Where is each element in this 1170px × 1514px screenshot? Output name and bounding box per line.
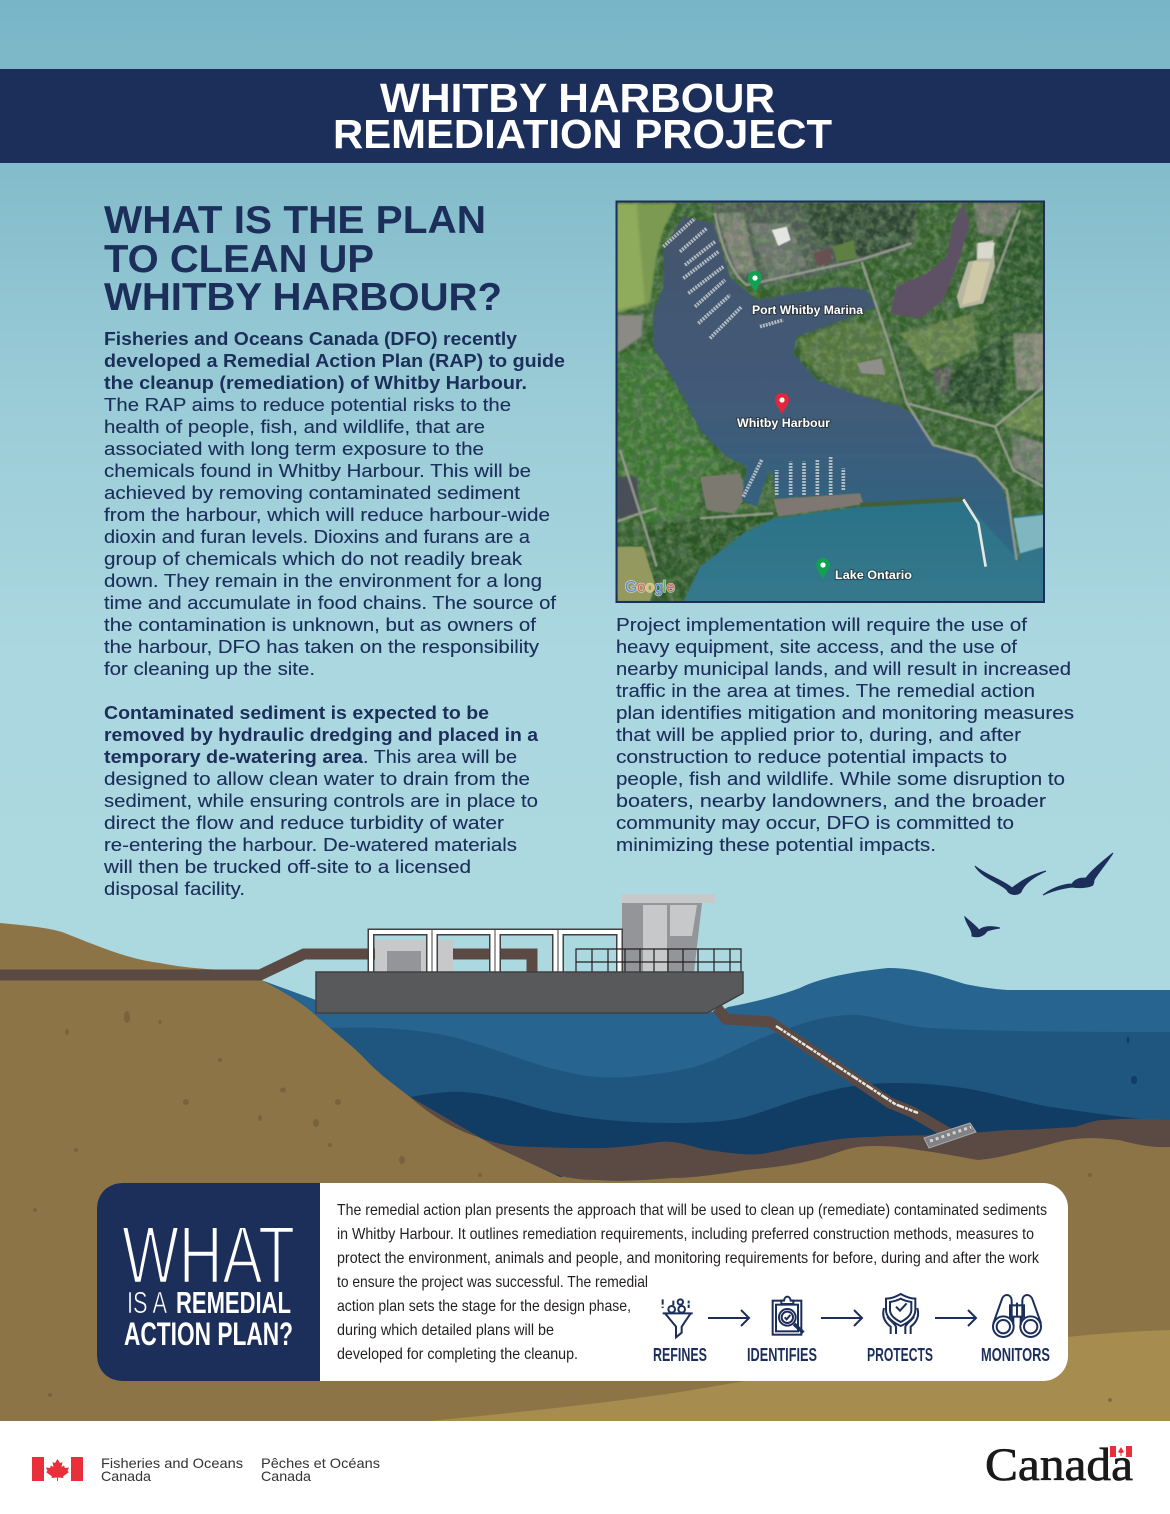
text block: project implementation: minimizing these potential impacts. — [616, 834, 936, 855]
text block: plan overview: chemicals found in Whitby Harbour. This will be — [104, 460, 531, 481]
text block: project implementation: heavy equipment, site access, and the use of — [616, 636, 1018, 657]
text block: plan overview: group of chemicals which do not readily break — [104, 548, 523, 569]
map labels — [625, 305, 912, 596]
barge tower — [622, 894, 715, 972]
arrow — [935, 1310, 976, 1326]
heading: what is the plan: TO CLEAN UP — [104, 238, 374, 281]
barge hull — [316, 972, 743, 1013]
panel heading block: WHAT — [122, 1210, 295, 1301]
text block: dredging method: re-entering the harbour. De-watered materials — [104, 834, 517, 855]
text block: project implementation: Project implementation will require the use of — [616, 614, 1028, 635]
arrow — [708, 1310, 749, 1326]
panel heading block — [97, 1183, 320, 1381]
department name: Pêches et Océans — [261, 1455, 380, 1471]
heading: what is the plan — [104, 199, 502, 319]
text block: dredging method: . This area will be — [363, 746, 517, 767]
step labels: MONITORS — [981, 1345, 1050, 1365]
text block: plan overview: achieved by removing contaminated sediment — [104, 482, 520, 503]
text block: dredging method: temporary de-watering area — [104, 746, 364, 767]
text block: plan overview: down. They remain in the environment for a long — [104, 570, 542, 591]
text block: dredging method: sediment, while ensuring controls are in place to — [104, 790, 538, 811]
panel description: during which detailed plans will be — [337, 1322, 554, 1339]
department name — [101, 1455, 380, 1484]
illustration: dredging cross-section — [0, 894, 1170, 1421]
map labels: Google — [625, 579, 675, 596]
text block: project implementation: construction to reduce potential impacts to — [616, 746, 1007, 767]
breakwater — [963, 499, 986, 567]
harbour water — [653, 217, 1018, 562]
text block: dredging method: Contaminated sediment is expected to be — [104, 702, 489, 723]
step labels — [653, 1345, 1050, 1365]
title banner: REMEDIATION PROJECT — [333, 111, 832, 157]
text block: project implementation: people, fish and wildlife. While some disruption to — [616, 768, 1065, 789]
step labels: REFINES — [653, 1345, 707, 1365]
panel heading block: REMEDIAL — [176, 1285, 291, 1320]
step labels: IDENTIFIES — [747, 1345, 817, 1365]
text block: plan overview: time and accumulate in food chains. The source of — [104, 592, 557, 613]
department name: Canada — [101, 1468, 151, 1484]
water layer: shallow — [260, 968, 1170, 1240]
panel description: action plan sets the stage for the design phase, — [337, 1298, 631, 1315]
text block: plan overview: health of people, fish, and wildlife, that are — [104, 416, 485, 437]
barge frames — [371, 932, 620, 972]
panel description: protect the environment, animals and people, and monitoring requirements for before, during and after the work — [337, 1250, 1040, 1267]
footer band — [0, 1421, 1170, 1514]
map pin: Lake Ontario — [816, 558, 830, 579]
water layer: deep — [410, 1083, 1170, 1200]
grey machinery box — [375, 940, 453, 972]
panel: what is a remedial action plan — [97, 1183, 1068, 1381]
panel description: developed for completing the cleanup. — [337, 1346, 578, 1363]
sediment layer — [410, 1097, 1170, 1181]
text block: plan overview: Fisheries and Oceans Canada (DFO) recently — [104, 328, 518, 349]
text block: project implementation: boaters, nearby landowners, and the broader — [616, 790, 1046, 811]
text block: dredging method: direct the flow and reduce turbidity of water — [104, 812, 504, 833]
title banner — [0, 69, 1170, 163]
text block: dredging method: removed by hydraulic dredging and placed in a — [104, 724, 539, 745]
panel heading block: IS A — [127, 1285, 167, 1320]
step labels: PROTECTS — [867, 1345, 933, 1365]
land texture — [617, 202, 1044, 601]
text block: plan overview: the harbour, DFO has taken on the responsibility — [104, 636, 540, 657]
panel description: in Whitby Harbour. It outlines remediation requirements, including preferred construction methods, measures to — [337, 1226, 1034, 1243]
text block: plan overview: developed a Remedial Action Plan (RAP) to guide — [104, 350, 565, 371]
text block: dredging method: will then be trucked off-site to a licensed — [103, 856, 471, 877]
text block: project implementation: traffic in the area at times. The remedial action — [616, 680, 1035, 701]
lake water — [683, 500, 1044, 601]
sediment slurry in pipe — [776, 1026, 918, 1113]
roads — [617, 210, 1044, 567]
ground — [0, 923, 1170, 1421]
text block: plan overview — [104, 328, 565, 679]
map pin: Whitby Harbour — [775, 393, 789, 414]
water layer: middle — [300, 1015, 1170, 1240]
title banner: WHITBY HARBOUR — [380, 75, 775, 121]
text block: plan overview: the contamination is unknown, but as owners of — [104, 614, 537, 635]
barge railing — [576, 949, 741, 972]
arrow — [821, 1310, 862, 1326]
heading: what is the plan: WHITBY HARBOUR? — [104, 276, 502, 319]
panel description: to ensure the project was successful. The remedial — [337, 1274, 648, 1291]
text block: project implementation: community may occur, DFO is committed to — [616, 812, 1014, 833]
map labels: Lake Ontario — [835, 570, 912, 582]
dredge head — [924, 1123, 976, 1148]
text block: plan overview: from the harbour, which will reduce harbour-wide — [104, 504, 550, 525]
intake pipe — [0, 954, 532, 975]
dredge pipe — [717, 1008, 950, 1134]
department name: Fisheries and Oceans — [101, 1455, 243, 1471]
logo: Government of Canada flag symbol — [32, 1457, 83, 1481]
text block: dredging method — [103, 702, 539, 899]
map pin: Port Whitby Marina — [748, 271, 762, 292]
satellite map of Whitby Harbour — [616, 201, 1044, 602]
department name: Canada — [261, 1468, 311, 1484]
ground speckles — [33, 1011, 1112, 1402]
text block: plan overview: associated with long term exposure to the — [104, 438, 484, 459]
text block: project implementation — [616, 614, 1074, 855]
icon: clipboard and magnifier, identifies — [773, 1297, 803, 1335]
panel heading block: ACTION PLAN? — [124, 1316, 293, 1352]
text block: dredging method: disposal facility. — [104, 878, 245, 899]
text block: plan overview: for cleaning up the site. — [104, 658, 315, 679]
text block: project implementation: plan identifies mitigation and monitoring measures — [616, 702, 1074, 723]
text block: plan overview: the cleanup (remediation) of Whitby Harbour. — [104, 372, 527, 393]
text block: project implementation: that will be applied prior to, during, and after — [616, 724, 1021, 745]
panel description — [337, 1202, 1047, 1363]
text block: plan overview: dioxin and furan levels. Dioxins and furans are a — [104, 526, 531, 547]
icon: shield and hands, protects — [883, 1294, 918, 1334]
water specks — [1126, 1037, 1137, 1084]
lower light ground — [0, 1330, 1170, 1421]
text block: plan overview: The RAP aims to reduce potential risks to the — [104, 394, 511, 415]
icon: funnel, refines — [663, 1299, 693, 1337]
marina docks — [663, 218, 843, 497]
text block: dredging method: designed to allow clean water to drain from the — [104, 768, 530, 789]
panel description: The remedial action plan presents the approach that will be used to clean up (remediate) contaminated sediments — [337, 1202, 1047, 1219]
icon: seagulls — [965, 853, 1113, 937]
heading: what is the plan: WHAT IS THE PLAN — [104, 199, 486, 242]
text block: project implementation: nearby municipal lands, and will result in increased — [616, 658, 1071, 679]
map labels: Port Whitby Marina — [752, 305, 864, 317]
icon: binoculars, monitors — [993, 1295, 1041, 1337]
map labels: Whitby Harbour — [737, 418, 831, 430]
Canada wordmark: Canada — [985, 1439, 1133, 1491]
